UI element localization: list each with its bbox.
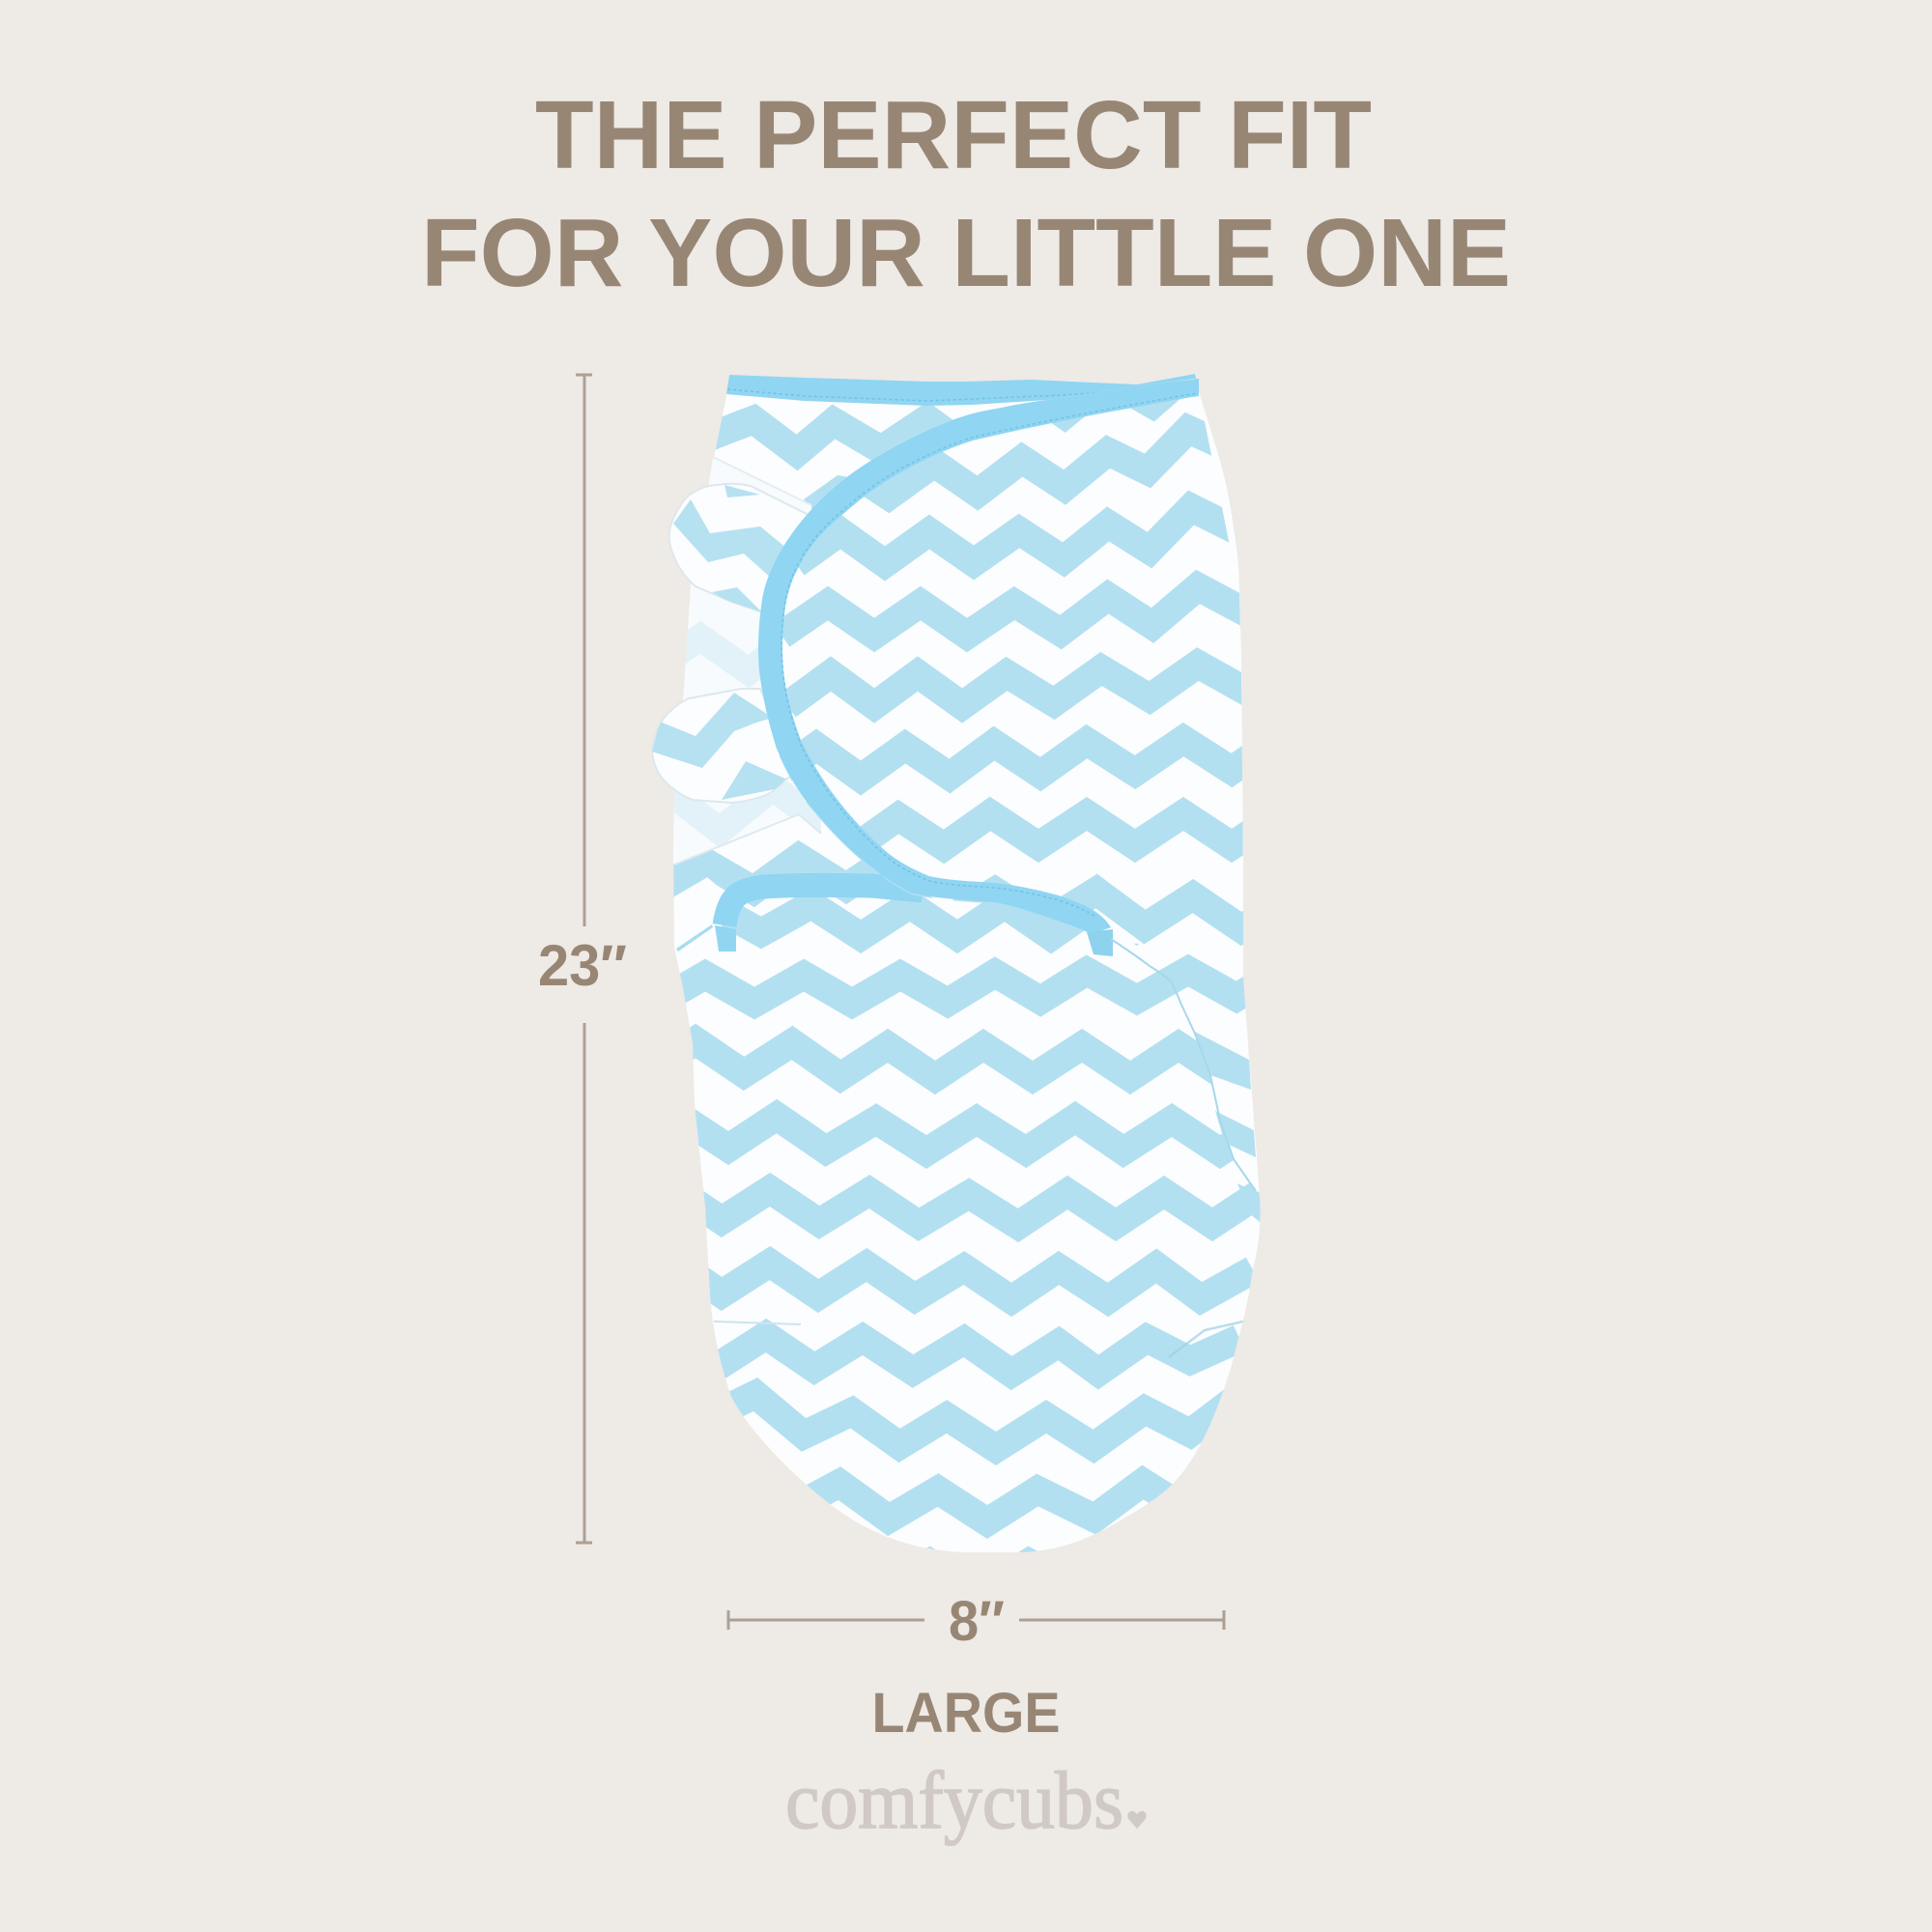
height dimension: 23 inches: 23″	[538, 933, 627, 998]
width dimension: 8 inches: 8″	[949, 1590, 1005, 1653]
swaddle product	[651, 374, 1260, 1552]
upper mitten wing	[669, 484, 809, 618]
left edge stripe	[676, 924, 713, 952]
wrap flap with chevrons	[760, 379, 1243, 946]
title: FOR YOUR LITTLE ONE	[421, 199, 1511, 307]
title	[421, 81, 1511, 307]
right tab	[1087, 929, 1113, 956]
title: THE PERFECT FIT	[535, 81, 1372, 189]
back fabric right of seam	[1195, 1032, 1260, 1223]
icon: heart	[1127, 1811, 1147, 1829]
height dimension: 23 inches	[538, 375, 627, 1543]
size label: LARGE	[871, 1682, 1061, 1745]
lower mitten wing	[652, 689, 797, 803]
inner panel behind flap	[674, 456, 821, 866]
left tab	[715, 925, 736, 952]
flap binding	[758, 379, 1199, 934]
blue wedge behind flap	[804, 475, 847, 510]
swaddle body fabric	[673, 381, 1260, 1552]
pouch opening binding	[676, 885, 923, 952]
width dimension: 8 inches	[728, 1590, 1224, 1653]
pouch seam	[1111, 939, 1256, 1191]
brand logo: comfycubs	[785, 1755, 1123, 1846]
top binding strip	[726, 374, 1199, 406]
